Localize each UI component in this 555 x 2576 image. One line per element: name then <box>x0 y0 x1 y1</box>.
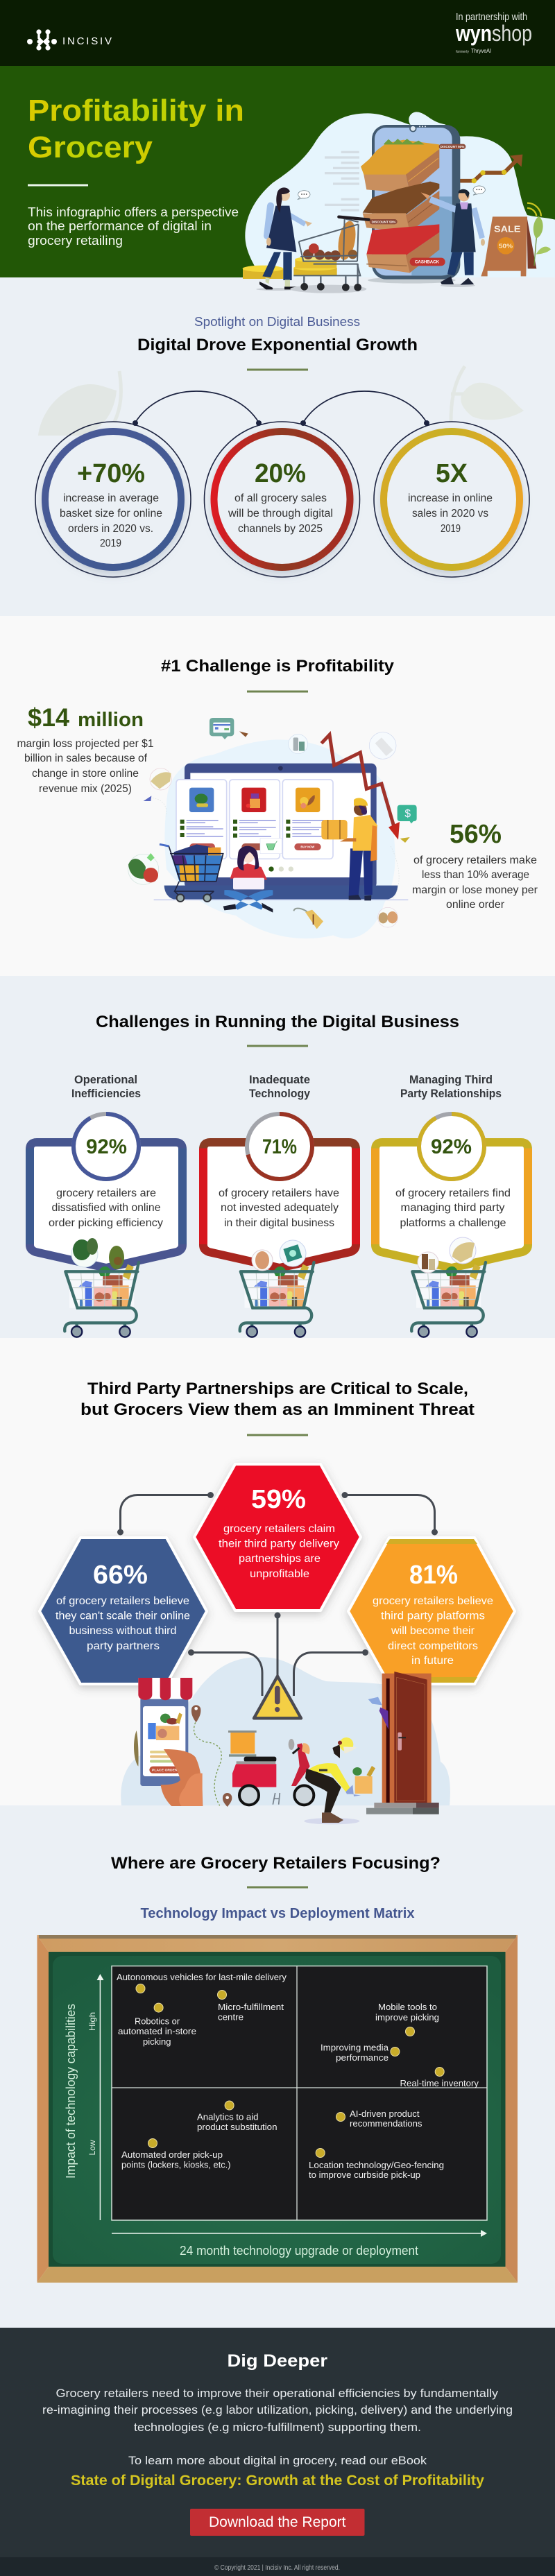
decorative leaves <box>38 366 524 436</box>
matrix items <box>117 1972 479 2180</box>
challenge card: inadequate technology: Inadequate <box>249 1074 310 1086</box>
hexagon: 81%: in future <box>411 1655 454 1667</box>
sale sign: SALE <box>494 223 521 234</box>
copyright bar <box>0 2557 555 2576</box>
challenge card: inadequate technology <box>203 1074 356 1268</box>
hexagon: 81%: grocery retailers believe <box>373 1595 493 1607</box>
stat: 56%: online order <box>446 899 504 911</box>
matrix items: centre <box>218 2011 244 2023</box>
hexagon: 59%: their third party delivery <box>219 1538 339 1549</box>
partnership logo: wynshop <box>455 12 532 54</box>
mini cart chat box <box>260 839 282 854</box>
stat circle: 20% <box>204 422 359 577</box>
hexagon: 81%: will become their <box>391 1625 475 1637</box>
body copy: To learn more about digital in grocery, read our eBook <box>128 2454 427 2467</box>
woman shopper <box>256 187 312 291</box>
challenge card: inadequate technology: Technology <box>249 1088 311 1100</box>
stat circle: 5X <box>374 422 529 577</box>
warning sign <box>254 1676 301 1718</box>
challenge card: operational inefficiencies: grocery retailers are <box>56 1187 156 1199</box>
stat circle: +70%: +70% <box>77 459 145 488</box>
stat circle: 5X: sales in 2020 vs <box>412 508 488 520</box>
section heading: third party partnerships: Third Party Partnerships are Critical to Scale, <box>87 1380 468 1398</box>
matrix items: Real-time inventory <box>400 2078 479 2088</box>
hexagon: 59%: partnerships are <box>239 1553 321 1565</box>
door with hand <box>366 1672 439 1814</box>
section heading: spotlight <box>137 314 418 354</box>
matrix items: Micro-fulfillment <box>218 2002 284 2012</box>
cart: third <box>411 1262 486 1337</box>
challenge card: inadequate technology: not invested adequately <box>221 1202 339 1214</box>
delivery scene backdrop <box>121 1657 450 1805</box>
wooden frame <box>37 1935 518 2283</box>
matrix items: Automated order pick-up <box>121 2149 223 2160</box>
section heading: third party partnerships: but Grocers View them as an Imminent Threat <box>80 1400 475 1419</box>
hexagon: 66%: 66% <box>93 1561 148 1590</box>
challenge card: inadequate technology: of grocery retailers have <box>219 1187 339 1199</box>
sale sign: 50% <box>499 243 513 250</box>
stat circle: 20%: 20% <box>255 459 306 488</box>
hexagon: 59%: grocery retailers claim <box>223 1523 335 1535</box>
stat: $14 million <box>17 703 154 795</box>
delivery rider <box>304 1737 375 1824</box>
stat: 56%: less than 10% average <box>422 869 529 881</box>
hero description: This infographic offers a perspective <box>28 205 239 219</box>
download button <box>190 2509 365 2536</box>
crate: soil <box>363 182 439 232</box>
axis labels <box>64 2004 418 2258</box>
hero title <box>28 94 244 164</box>
matrix items: Location technology/Geo-fencing <box>309 2160 444 2170</box>
man shop assistant <box>421 186 485 287</box>
floating grocery items above carts <box>71 1237 476 1273</box>
smartphone <box>372 125 460 280</box>
phone storefront: PLACE ORDER <box>152 1768 178 1771</box>
stat circle: 5X: increase in online <box>408 492 493 504</box>
partnership logo: wynshop: wyn <box>455 21 492 46</box>
challenge card: inadequate technology: in their digital business <box>224 1217 334 1229</box>
matrix items: Improving media <box>321 2042 389 2053</box>
section heading: third party partnerships <box>80 1380 475 1419</box>
matrix items: improve picking <box>375 2012 439 2023</box>
challenge card: managing third party relationships: Managing Third <box>409 1074 493 1086</box>
labels: discount and cashback: CASHBACK <box>415 260 440 264</box>
challenge card: operational inefficiencies: Operational <box>74 1074 137 1086</box>
footer panel: dig deeper <box>0 2328 555 2576</box>
challenge card: inadequate technology: 71% <box>262 1135 297 1158</box>
challenge card: managing third party relationships: Party Relationships <box>400 1088 502 1100</box>
section heading: focus: Where are Grocery Retailers Focusing? <box>111 1854 441 1873</box>
hero description: grocery retailing <box>28 234 123 248</box>
laptop illustration <box>128 718 417 938</box>
matrix items: Mobile tools to <box>378 2002 437 2012</box>
stat: $14 million: $14 <box>28 703 69 732</box>
matrix items: product substitution <box>197 2122 278 2132</box>
stat: $14 million: million <box>78 709 144 731</box>
section heading: challenges: Challenges in Running the Digital Business <box>96 1013 459 1031</box>
product cards <box>176 780 333 872</box>
challenge card: managing third party relationships <box>375 1074 528 1268</box>
floating icons <box>128 718 417 929</box>
matrix items: points (lockers, kiosks, etc.) <box>121 2160 230 2170</box>
hero description: on the performance of digital in <box>28 219 212 233</box>
labels: discount and cashback: DISCOUNT 50% <box>372 220 396 223</box>
challenge card: managing third party relationships: managing third party <box>401 1202 505 1214</box>
challenge card: operational inefficiencies: Inefficiencies <box>71 1088 141 1100</box>
partnership logo: wynshop: ThryveAI <box>471 47 491 54</box>
hexagon: 66% <box>40 1538 207 1684</box>
stat: 56% <box>412 820 538 911</box>
scooter <box>228 1731 314 1805</box>
hero description <box>28 205 239 248</box>
progress ring <box>419 1114 484 1179</box>
matrix items: picking <box>143 2036 171 2047</box>
section heading: spotlight: Spotlight on Digital Business <box>194 314 360 329</box>
section heading: profitability: #1 Challenge is Profitability <box>161 657 395 676</box>
axis labels: 24 month technology upgrade or deployment <box>180 2244 418 2258</box>
matrix items: automated in-store <box>118 2026 196 2036</box>
hero illustration: phone, crates, shoppers <box>243 112 555 293</box>
labels: discount and cashback <box>370 144 466 266</box>
matrix items: recommendations <box>350 2118 422 2129</box>
challenge card: operational inefficiencies <box>30 1074 182 1268</box>
hexagon: 81%: direct competitors <box>388 1640 478 1652</box>
challenge card: operational inefficiencies: order picking efficiency <box>49 1217 163 1229</box>
heading: Dig Deeper <box>228 2351 327 2371</box>
stat: 56%: of grocery retailers make <box>413 855 537 866</box>
progress ring <box>74 1114 139 1179</box>
body copy <box>42 2387 513 2467</box>
stat: $14 million: change in store online <box>32 768 139 780</box>
challenge card: operational inefficiencies: 92% <box>86 1135 127 1158</box>
challenge card: managing third party relationships: of grocery retailers find <box>395 1187 511 1199</box>
laptop <box>154 764 408 900</box>
shopping cart with bags <box>160 844 223 902</box>
delivery scene illustration <box>134 1672 439 1824</box>
hero panel <box>0 66 555 293</box>
logo: Incisiv: INCISIV <box>62 35 112 47</box>
seated woman with tablet <box>223 846 273 913</box>
challenge card: operational inefficiencies: dissatisfied with online <box>51 1202 161 1214</box>
matrix items: Autonomous vehicles for last-mile delivery <box>117 1972 287 1982</box>
red falling arrow <box>321 735 400 840</box>
matrix items: Robotics or <box>135 2016 180 2027</box>
matrix subtitle: Technology Impact vs Deployment Matrix <box>140 1906 415 1921</box>
stat circle: 20%: will be through digital <box>228 508 333 520</box>
body copy: re-imagining their processes (e.g labor utilization, picking, delivery) and the underlying <box>42 2403 513 2416</box>
stat: 56%: margin or lose money per <box>412 884 538 896</box>
hexagon: 81%: third party platforms <box>381 1611 485 1622</box>
connector lines between hexagons <box>117 1492 438 1696</box>
stat circle: 5X: 5X <box>436 459 468 488</box>
download button: Download the Report <box>209 2514 346 2530</box>
axes <box>97 1974 487 2237</box>
progress ring <box>247 1114 312 1179</box>
stat: 56%: 56% <box>450 820 502 849</box>
copyright bar: © Copyright 2021 | Incisiv Inc. All right reserved. <box>214 2564 340 2572</box>
hero title: Grocery <box>28 130 153 164</box>
matrix items: to improve curbside pick-up <box>309 2170 420 2180</box>
header bar <box>0 0 555 66</box>
body copy: Grocery retailers need to improve their operational efficiencies by fundamentally <box>56 2387 499 2400</box>
hexagon: 66%: business without third <box>69 1625 176 1637</box>
chalkboard matrix <box>37 1935 518 2283</box>
stat: $14 million: billion in sales because of <box>24 753 148 764</box>
stat circle: +70%: basket size for online <box>60 508 162 520</box>
ebook title: State of Digital Grocery: Growth at the Cost of Profitability <box>71 2473 484 2489</box>
logo: Incisiv <box>27 29 112 51</box>
hexagon: 59%: 59% <box>251 1485 306 1514</box>
challenge card: managing third party relationships: platforms a challenge <box>400 1217 506 1229</box>
matrix items: performance <box>336 2052 388 2063</box>
partnership logo: wynshop: formerly <box>456 50 469 54</box>
matrix items: AI-driven product <box>350 2109 420 2119</box>
hexagon: 81%: 81% <box>409 1561 458 1590</box>
hexagon: 66%: they can't scale their online <box>56 1611 190 1622</box>
stat circle: 20%: of all grocery sales <box>234 492 327 504</box>
hexagon: 81% <box>348 1538 515 1684</box>
axis labels: Low <box>87 2140 97 2156</box>
sale sign <box>481 216 536 276</box>
stat circle: +70%: orders in 2020 vs. <box>68 523 153 535</box>
stat circle: +70% <box>35 422 191 577</box>
connector arcs <box>133 391 429 426</box>
growth arrow <box>458 155 522 183</box>
axis labels: Impact of technology capabilities <box>64 2004 78 2179</box>
hexagon: 59% <box>194 1464 361 1611</box>
matrix items: Analytics to aid <box>197 2111 258 2122</box>
axis labels: High <box>87 2012 97 2031</box>
partnership logo: wynshop: shop <box>492 21 532 46</box>
partnership logo: wynshop: In partnership with <box>456 12 527 23</box>
product cards: BUY NOW <box>300 845 315 849</box>
coins <box>243 257 337 279</box>
quadrant grid <box>112 1966 487 2220</box>
hexagon: 66%: party partners <box>87 1640 160 1652</box>
phone storefront <box>134 1678 203 1806</box>
stat: $14 million: revenue mix (2025) <box>39 783 132 795</box>
delivery man with parcel <box>321 798 377 900</box>
route pins <box>191 1705 232 1807</box>
shopping cart with produce <box>290 217 369 293</box>
floating icons: $ <box>404 808 411 820</box>
stat circle: 5X: 2019 <box>441 523 461 535</box>
stat circle: +70%: 2019 <box>100 538 121 549</box>
cart: second <box>240 1262 314 1337</box>
stat circle: +70%: increase in average <box>63 492 159 504</box>
plant <box>527 203 551 266</box>
challenge card: managing third party relationships: 92% <box>431 1135 472 1158</box>
crate: grain <box>361 139 439 193</box>
stat: $14 million: margin loss projected per $1 <box>17 738 154 750</box>
labels: discount and cashback: DISCOUNT 50% <box>441 145 465 148</box>
hexagon: 66%: of grocery retailers believe <box>56 1595 189 1607</box>
hexagon: 59%: unprofitable <box>250 1568 309 1580</box>
body copy: technologies (e.g micro-fulfillment) supporting them. <box>134 2421 421 2434</box>
crate: tomatoes <box>366 224 439 273</box>
hero title: Profitability in <box>28 94 244 128</box>
section heading: spotlight: Digital Drove Exponential Growth <box>137 336 418 354</box>
cart: first <box>65 1262 139 1337</box>
stat circle: 20%: channels by 2025 <box>238 523 323 535</box>
